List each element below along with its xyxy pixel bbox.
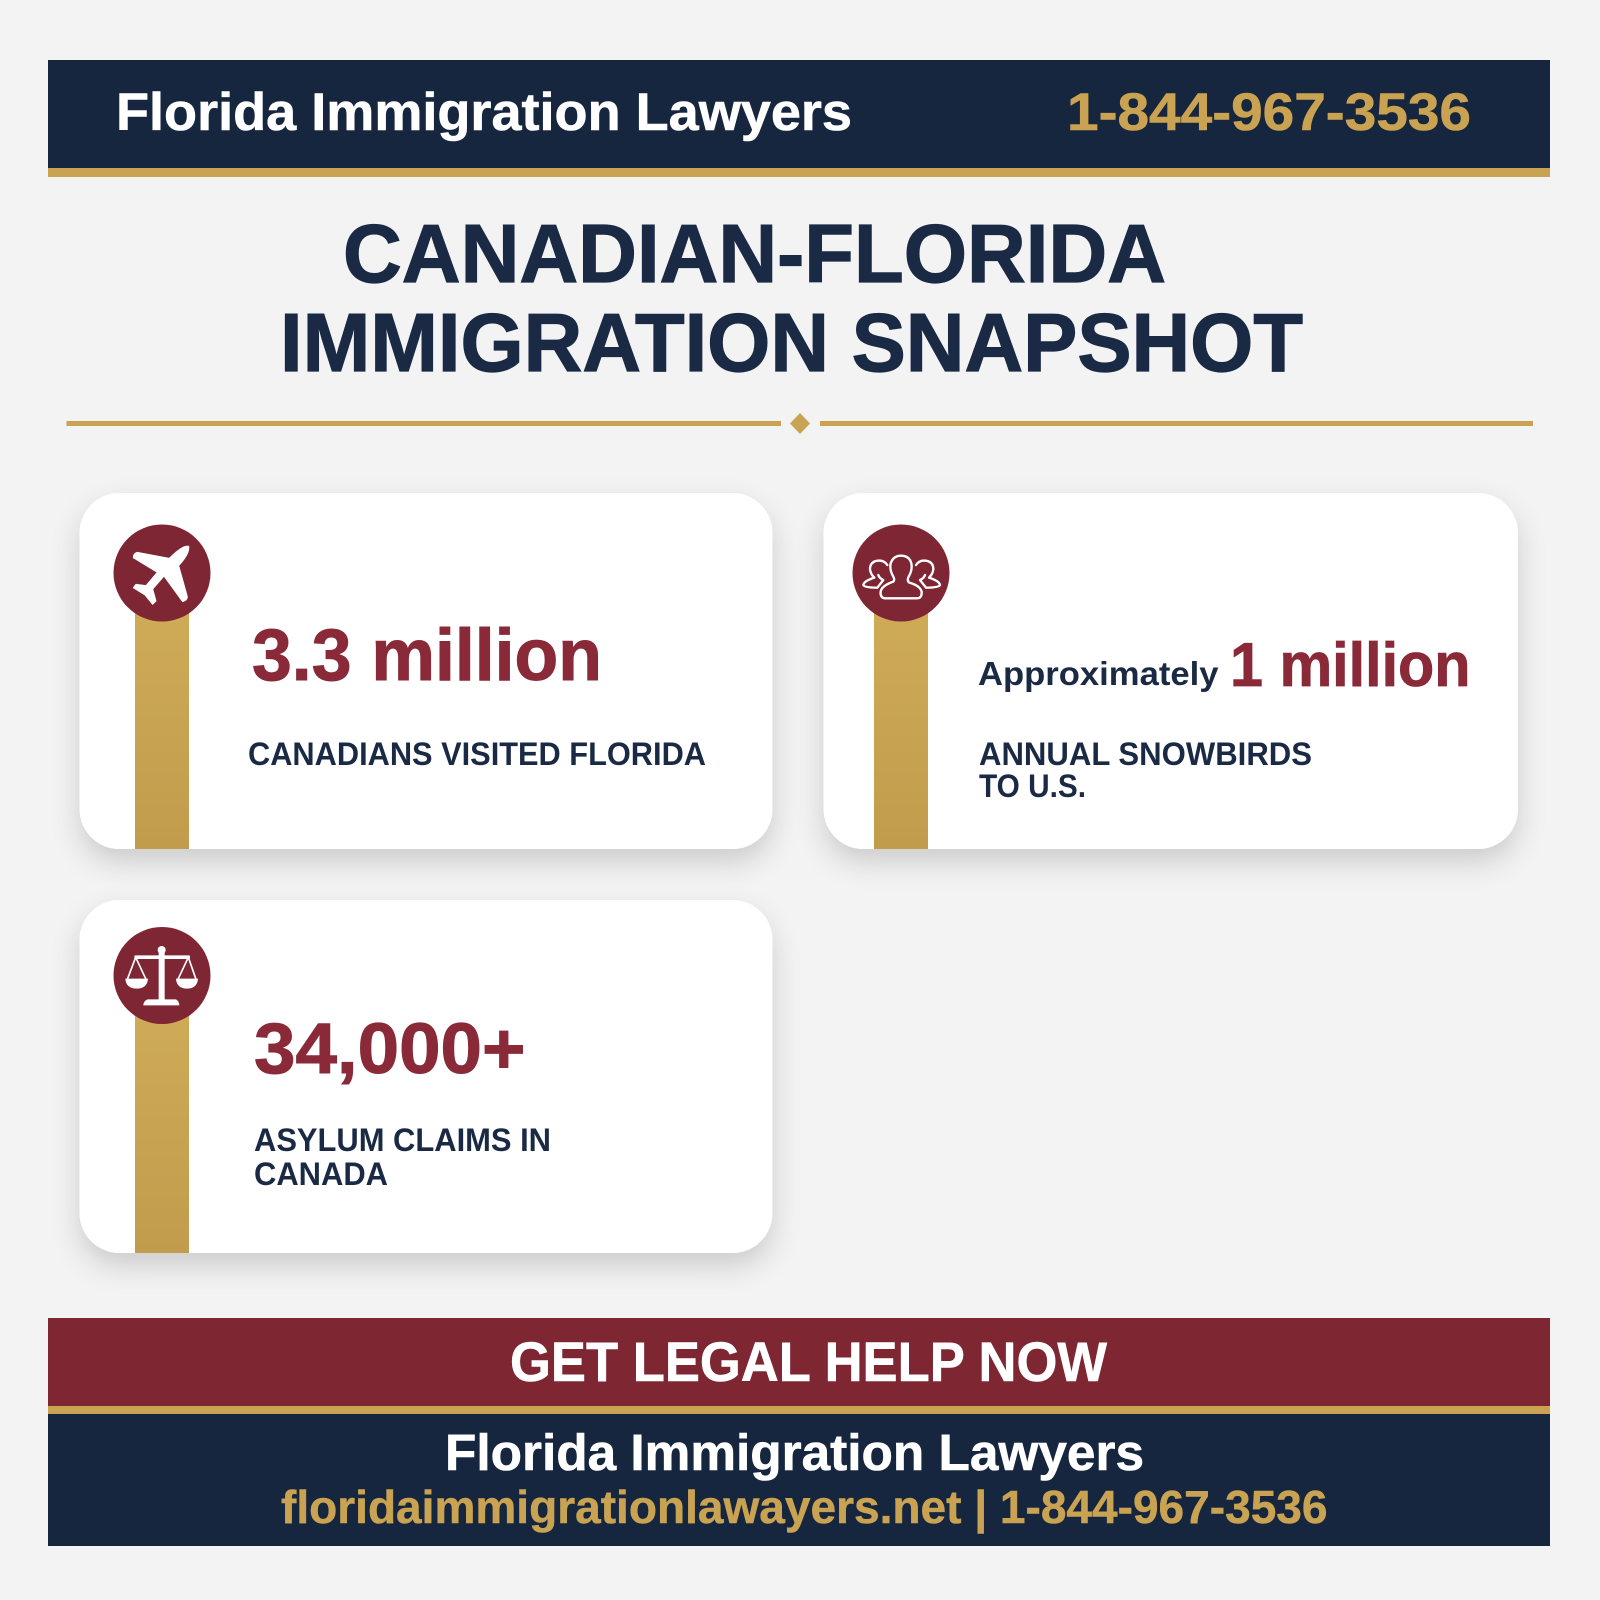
stat label [979,736,1312,804]
header phone number: 1-844-967-3536 [1067,83,1471,142]
footer website and phone: floridaimmigrationlawayers.net | 1-844-967-3536 [281,1481,1328,1533]
footer contact band [48,1414,1550,1546]
footer firm name: Florida Immigration Lawyers [445,1424,1144,1481]
header firm name: Florida Immigration Lawyers [116,83,852,142]
header banner [48,60,1550,177]
stat label: CANADIANS VISITED FLORIDA [248,736,706,772]
icon: group of people [852,524,950,622]
title: CANADIAN-FLORIDA [343,207,1166,300]
call to action text: GET LEGAL HELP NOW [510,1330,1107,1393]
gold bar [135,600,189,849]
panel: Canadians visited Florida [80,493,772,849]
gold bar [135,1000,189,1253]
stat: 1 million: 1 million [1230,631,1470,700]
stat label: TO U.S. [979,768,1086,804]
title: IMMIGRATION SNAPSHOT [280,296,1303,389]
icon: scales of justice [114,927,210,1024]
panel: asylum claims [80,900,772,1253]
title [280,207,1303,389]
stat: 3.3 million: 3.3 million [252,615,602,696]
panel: annual snowbirds [824,493,1518,849]
footer call-to-action band [48,1318,1550,1414]
icon: airplane [114,524,210,622]
stat label: ASYLUM CLAIMS IN [254,1122,551,1158]
gold bar [874,600,928,849]
stat: 34,000+: 34,000+ [254,1010,526,1089]
stat label [254,1122,551,1192]
title divider with diamond [66,413,1533,434]
stat label: CANADA [254,1156,388,1192]
stat label: ANNUAL SNOWBIRDS [979,736,1312,772]
qualifier: approximately: Approximately [978,655,1219,692]
